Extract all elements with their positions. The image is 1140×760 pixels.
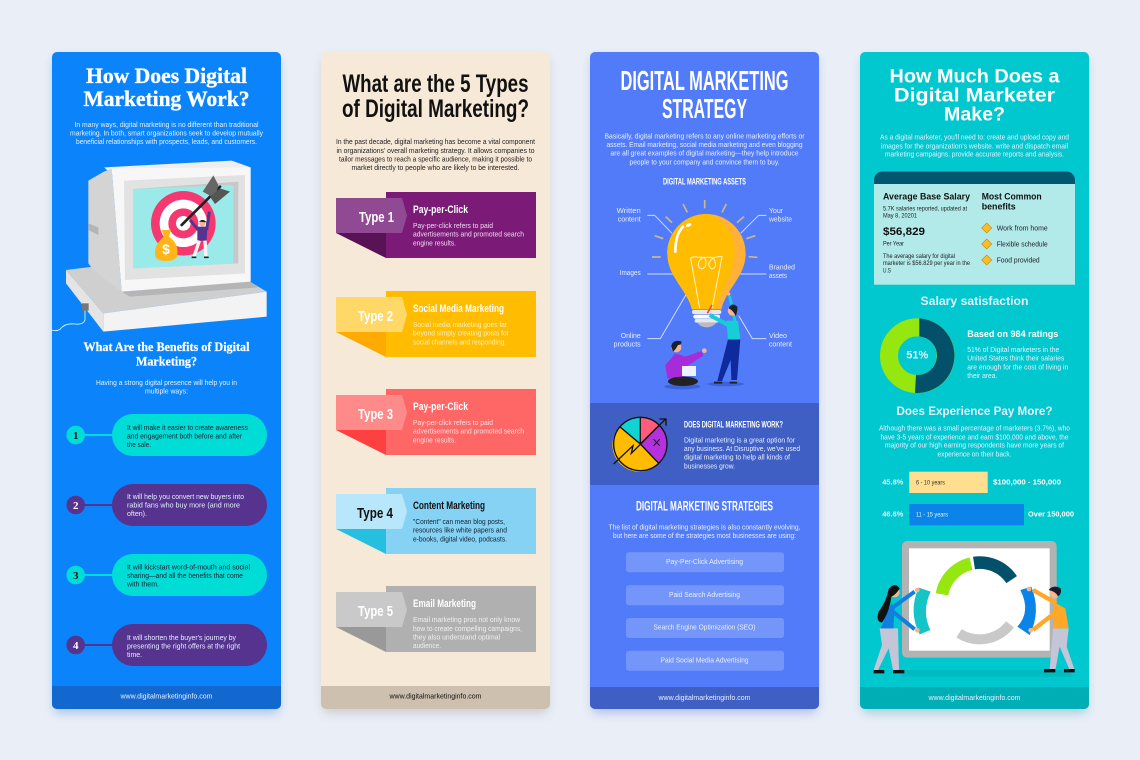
callout: does digital marketing work: DOES DIGITAL MARKETING WORK? <box>684 419 783 430</box>
type 4: "Content" can mean blog posts, <box>413 519 505 526</box>
benefit 2: It will help you convert new buyers into <box>127 494 244 501</box>
experience text <box>879 426 1070 458</box>
intro text: market directly to people who are likely to be interested. <box>352 165 520 172</box>
heading: assets: DIGITAL MARKETING ASSETS <box>663 176 746 187</box>
footer <box>52 686 281 709</box>
intro text <box>880 135 1069 159</box>
strategy buttons: Search Engine Optimization (SEO) <box>654 625 756 632</box>
title: Make? <box>944 105 1005 126</box>
footer: www.digitalmarketinginfo.com <box>928 695 1021 702</box>
most common benefits: Most Common <box>982 192 1042 203</box>
bar chart: experience: 6 - 10 years <box>916 480 945 486</box>
intro text: are all great examples of digital marketing—they help introduce <box>610 151 799 158</box>
heading: salary satisfaction: Salary satisfaction <box>920 296 1028 308</box>
type 3: Type 3 <box>358 406 393 423</box>
icon: pie chart with arrow <box>612 417 667 472</box>
bar chart: experience: 11 - 15 years <box>916 513 948 519</box>
title: How Much Does a <box>890 66 1060 87</box>
benefit 1: the sale. <box>127 442 151 449</box>
type 5 <box>336 586 536 652</box>
benefit 3: 3 <box>73 570 79 582</box>
heading: experience: Does Experience Pay More? <box>896 404 1052 418</box>
type 5: Email Marketing <box>413 598 476 610</box>
icon: man <box>1027 587 1075 672</box>
average base salary: Average Base Salary <box>883 192 971 203</box>
footer <box>590 687 819 709</box>
chart: light bulb with asset labels: Written <box>617 208 641 215</box>
intro text: In many ways, digital marketing is no different than traditional <box>74 122 259 129</box>
heading: strategies: DIGITAL MARKETING STRATEGIES <box>636 498 773 514</box>
intro text: people to your company and convince them to buy. <box>630 159 780 166</box>
strategy buttons: Pay-Per-Click Advertising <box>666 559 743 566</box>
title <box>890 66 1060 126</box>
intro text: beneficial relationships with prospects, leads, and customers. <box>76 139 257 146</box>
benefit 3: sharing—and all the benefits that come <box>127 573 243 580</box>
average base salary <box>883 192 971 274</box>
icon: woman <box>874 585 920 673</box>
intro text: in organizations' overall marketing strategy. It allows companies to <box>336 148 535 155</box>
footer <box>321 686 550 709</box>
most common benefits: benefits <box>982 201 1016 212</box>
most common benefits: Flexible schedule <box>997 241 1048 248</box>
average base salary: U.S <box>883 268 891 274</box>
type 3: Pay-per-click refers to paid <box>413 420 493 427</box>
type 1: advertisements and promoted search <box>413 232 524 239</box>
benefits intro: multiple ways: <box>145 388 188 396</box>
type 2: beyond simply creating posts for <box>413 331 510 338</box>
title: of Digital Marketing? <box>342 95 529 123</box>
benefit 1: 1 <box>73 430 78 442</box>
type 2: Type 2 <box>358 308 393 325</box>
bar chart: experience: 46.6% <box>882 510 904 519</box>
intro text <box>336 139 535 172</box>
callout: does digital marketing work <box>590 403 819 485</box>
ratings text: United States think their salaries <box>967 356 1065 363</box>
illustration: people assembling donut on screen <box>874 541 1075 677</box>
intro text: In the past decade, digital marketing has become a vital component <box>336 139 535 146</box>
experience text: majority of our high earning respondents have more years of <box>885 443 1064 450</box>
type 2: Social Media Marketing <box>413 303 504 315</box>
intro text: marketing campaigns. provide accurate reports and analysis. <box>885 152 1064 159</box>
average base salary: Per Year <box>883 241 904 247</box>
title: DIGITAL MARKETING <box>620 65 788 96</box>
benefits intro: Having a strong digital presence will help you in <box>96 380 237 387</box>
most common benefits: Food provided <box>997 257 1040 264</box>
benefit 3: with them. <box>126 581 159 588</box>
bar chart: experience <box>882 472 1074 525</box>
chart: light bulb with asset labels: content <box>618 217 641 224</box>
bar chart: experience: 45.8% <box>882 477 904 486</box>
type 3: advertisements and promoted search <box>413 429 524 436</box>
type 2: Social media marketing goes far <box>413 322 508 329</box>
chart: light bulb with asset labels: Video <box>769 333 787 340</box>
benefit 4: It will shorten the buyer's journey by <box>127 635 236 642</box>
chart: light bulb with asset labels: content <box>769 342 792 349</box>
ratings text <box>967 329 1068 380</box>
benefit 1: It will make it easier to create awareness <box>127 425 248 432</box>
benefit 4 <box>66 624 267 666</box>
benefit 4: presenting the right offers at the right <box>127 644 240 651</box>
heading: benefits: What Are the Benefits of Digital <box>84 339 250 354</box>
panel: how much does a digital marketer make <box>860 52 1089 713</box>
intro text: Basically, digital marketing refers to any online marketing efforts or <box>604 133 805 140</box>
intro text: images for the organization's website. write and dispatch email <box>881 143 1068 150</box>
strategy buttons <box>626 552 784 671</box>
benefits intro <box>96 380 237 396</box>
chart: light bulb with asset labels: assets <box>769 273 787 280</box>
heading: benefits <box>84 339 250 368</box>
bar chart: experience: $100,000 - 150,000 <box>993 477 1061 486</box>
footer: www.digitalmarketinginfo.com <box>658 695 751 702</box>
chart: light bulb with asset labels: Branded <box>769 264 795 271</box>
chart: light bulb with asset labels: products <box>614 342 641 349</box>
type 1: engine results. <box>413 240 456 247</box>
intro text: assets. Email marketing, social media marketing and even blogging <box>606 142 803 149</box>
ratings text: Based on 984 ratings <box>967 329 1058 339</box>
footer: www.digitalmarketinginfo.com <box>389 694 482 700</box>
footer <box>860 687 1089 709</box>
donut chart <box>889 318 954 393</box>
salary card <box>874 172 1075 285</box>
chart: light bulb with asset labels: Online <box>621 333 641 340</box>
benefit 4: time. <box>127 652 142 659</box>
type 1: Pay-per-click refers to paid <box>413 223 493 230</box>
average base salary: May 8, 20201 <box>883 214 918 220</box>
icon: retro computer with target <box>52 161 267 332</box>
callout: does digital marketing work: businesses grow. <box>684 463 735 470</box>
callout: does digital marketing work: digital marketing to help all kinds of <box>684 455 790 462</box>
type 3 <box>336 389 536 455</box>
type 4 <box>336 488 536 554</box>
chart: light bulb with asset labels: website <box>768 217 792 224</box>
type 2: social channels and responding. <box>413 339 506 346</box>
type 3: engine results. <box>413 437 456 444</box>
type 5: how to create compelling campaigns, <box>413 626 522 633</box>
footer: www.digitalmarketinginfo.com <box>120 694 213 700</box>
average base salary: $56,829 <box>883 226 925 238</box>
type 1: Pay-per-Click <box>413 204 469 216</box>
strategies intro: The list of digital marketing strategies is also constantly evolving, <box>608 524 801 531</box>
intro text: tailor messages to reach a specific audience, making it possible to <box>339 157 532 164</box>
intro text <box>70 122 263 146</box>
benefit 4: 4 <box>73 640 79 652</box>
type 5: Email marketing pros not only know <box>413 617 521 624</box>
chart: light bulb with asset labels: Images <box>620 270 641 277</box>
type 4: Type 4 <box>357 505 394 522</box>
ratings text: 51% of Digital marketers in the <box>967 347 1059 354</box>
icon: seated person <box>664 341 707 389</box>
type 4: Content Marketing <box>413 500 485 512</box>
type 5: Type 5 <box>358 603 393 620</box>
panel: 5 types of digital marketing <box>321 52 550 713</box>
experience text: Although there was a small percentage of marketers (3.7%), who <box>879 426 1070 433</box>
most common benefits: Work from home <box>997 225 1048 232</box>
ratings text: their area. <box>967 373 997 380</box>
panel: how does digital marketing work <box>52 52 281 713</box>
type 1 <box>336 192 536 258</box>
intro text <box>604 133 805 166</box>
average base salary: The average salary for digital <box>883 254 955 260</box>
benefit 2: rabid fans who buy more (and more <box>127 503 240 510</box>
ratings text: are enough for the cost of living in <box>967 364 1068 371</box>
callout: does digital marketing work: Digital marketing is a great option for <box>684 437 796 444</box>
heading: benefits: Marketing? <box>136 354 197 368</box>
strategies intro: but here are some of the strategies most businesses are using: <box>613 533 796 540</box>
type 4: e-books, digital video, podcasts. <box>413 536 507 543</box>
strategies intro <box>608 524 801 540</box>
title <box>620 65 788 124</box>
donut chart: 51% <box>906 350 929 362</box>
type 3: Pay-per-Click <box>413 401 469 413</box>
callout: does digital marketing work: any business. At Disruptive, we've used <box>684 446 800 453</box>
type 5: they also understand optimal <box>413 634 500 642</box>
title: STRATEGY <box>662 93 747 124</box>
title: Marketing Work? <box>84 86 250 111</box>
icon: retro computer with target: $ <box>162 241 170 257</box>
most common benefits <box>982 192 1048 265</box>
experience text: have 3-5 years of experience and earn $100,000 and above, the <box>880 434 1069 441</box>
benefit 2: often). <box>127 511 147 518</box>
strategy buttons: Paid Search Advertising <box>669 592 740 599</box>
experience text: experience on their back. <box>938 451 1012 458</box>
benefit 2: 2 <box>73 500 79 512</box>
chart: light bulb with asset labels <box>614 200 795 389</box>
title: What are the 5 Types <box>342 70 528 98</box>
bar chart: experience: Over 150,000 <box>1028 510 1074 519</box>
strategy buttons: Paid Social Media Advertising <box>660 657 749 664</box>
panel: digital marketing strategy <box>590 52 819 713</box>
intro text: As a digital marketer, you'll need to: create and upload copy and <box>880 135 1069 142</box>
type 4: resources like white papers and <box>413 528 507 535</box>
title: Digital Marketer <box>894 86 1056 107</box>
title: How Does Digital <box>86 63 247 88</box>
icon: standing person <box>707 292 744 386</box>
benefit 2 <box>66 484 267 526</box>
benefit 3: It will kickstart word-of-mouth and social <box>127 564 250 571</box>
benefit 1 <box>66 414 267 456</box>
type 1: Type 1 <box>359 209 394 226</box>
intro text: marketing. In both, smart organizations seek to develop mutually <box>70 130 263 138</box>
benefit 1: and engagement both before and after <box>127 434 243 441</box>
average base salary: 5.7K salaries reported, updated at <box>883 207 967 213</box>
type 5: audience. <box>413 643 441 650</box>
chart: light bulb with asset labels: Your <box>769 208 784 215</box>
title <box>84 63 250 111</box>
type 2 <box>336 291 536 357</box>
benefit 3 <box>66 554 267 596</box>
average base salary: marketer is $56.829 per year in the <box>883 261 971 267</box>
title <box>342 70 529 123</box>
